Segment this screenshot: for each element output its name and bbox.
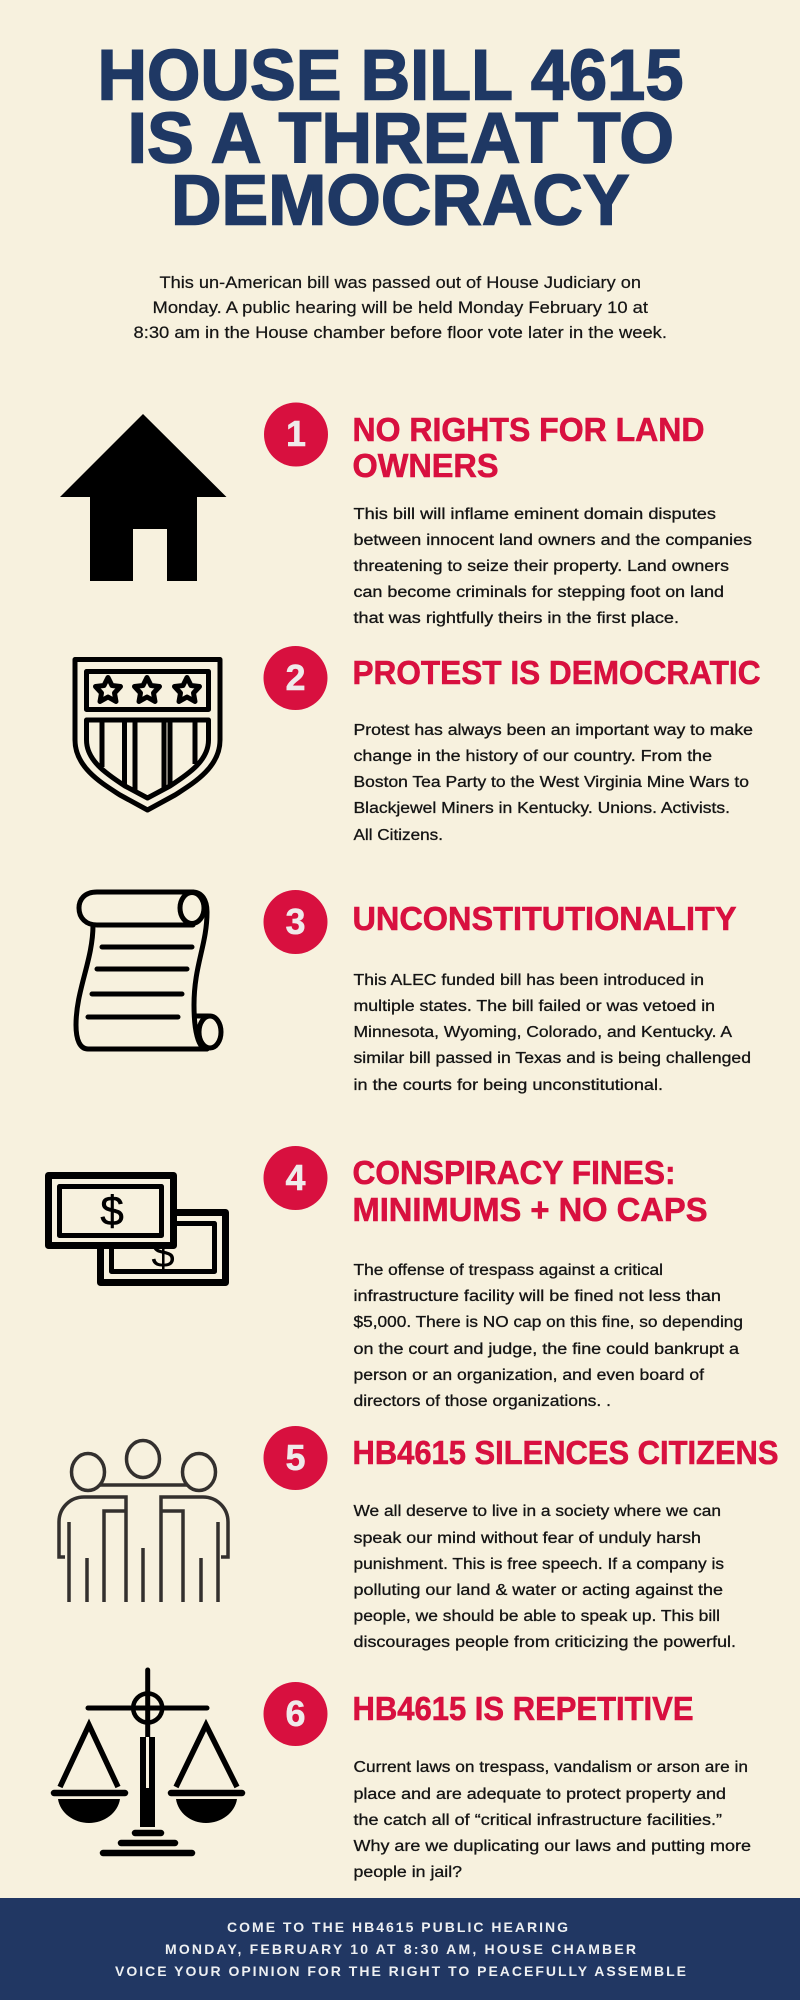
title: HOUSE BILL 4615	[98, 36, 684, 116]
icon: scales of justice	[54, 1670, 242, 1853]
number badge 6	[264, 1682, 328, 1746]
body text 6: place and are adequate to protect property and	[354, 1786, 726, 1803]
icon: money: $	[100, 1187, 124, 1234]
footer band	[0, 1898, 800, 2000]
number badge 5	[264, 1426, 328, 1490]
footer text	[115, 1919, 686, 1979]
body text 2: change in the history of our country. From the	[354, 748, 712, 765]
number badge 3	[264, 890, 328, 954]
panel: unconstitutionality	[76, 890, 751, 1094]
body text 2	[354, 722, 753, 844]
body text 4: $5,000. There is NO cap on this fine, so depending	[354, 1314, 743, 1331]
body text 6: the catch all of “critical infrastructure facilities.”	[354, 1812, 722, 1829]
intro text: This un-American bill was passed out of House Judiciary on	[160, 274, 641, 292]
body text 1: that was rightfully theirs in the first place.	[354, 610, 679, 627]
body text 2: All Citizens.	[354, 827, 443, 844]
body text 3	[354, 972, 751, 1094]
body text 2: Protest has always been an important way to make	[354, 722, 753, 739]
heading 4: CONSPIRACY FINES:	[352, 1154, 676, 1191]
body text 5: speak our mind without fear of unduly harsh	[354, 1530, 701, 1547]
intro text: 8:30 am in the House chamber before floor vote later in the week.	[134, 324, 667, 342]
body text 1	[354, 506, 752, 627]
body text 5: discourages people from criticizing the powerful.	[354, 1634, 736, 1651]
body text 1: can become criminals for stepping foot on land	[354, 584, 724, 601]
heading 5: HB4615 SILENCES CITIZENS	[352, 1434, 778, 1471]
number badge 1: 1	[286, 413, 306, 454]
panel: conspiracy fines	[48, 1146, 743, 1410]
body text 5: punishment. This is free speech. If a company is	[354, 1556, 724, 1573]
heading 3: UNCONSTITUTIONALITY	[352, 900, 736, 937]
body text 5: polluting our land & water or acting against the	[354, 1582, 723, 1599]
number badge 4	[264, 1146, 328, 1210]
heading 6: HB4615 IS REPETITIVE	[352, 1690, 694, 1727]
icon: money	[48, 1176, 226, 1282]
icon: shield	[75, 660, 220, 810]
icon: scroll	[76, 892, 221, 1049]
body text 3: multiple states. The bill failed or was vetoed in	[354, 998, 715, 1015]
body text 4: on the court and judge, the fine could bankrupt a	[354, 1341, 739, 1358]
body text 2: Blackjewel Miners in Kentucky. Unions. Activists.	[354, 800, 730, 817]
body text 1: threatening to seize their property. Land owners	[354, 558, 729, 575]
body text 4: infrastructure facility will be fined not less than	[354, 1288, 721, 1305]
number badge 6: 6	[285, 1693, 306, 1734]
number badge 3: 3	[285, 901, 306, 942]
panel: silences citizens	[59, 1426, 778, 1651]
title	[98, 36, 684, 240]
heading 4	[352, 1154, 708, 1228]
footer text: MONDAY, FEBRUARY 10 AT 8:30 AM, HOUSE CHAMBER	[165, 1941, 636, 1957]
number badge 2: 2	[285, 657, 306, 698]
panel: repetitive	[54, 1670, 751, 1881]
heading 2: PROTEST IS DEMOCRATIC	[352, 654, 760, 691]
body text 5: We all deserve to live in a society where we can	[354, 1503, 721, 1520]
body text 3: in the courts for being unconstitutional.	[354, 1077, 663, 1094]
icon: house	[60, 414, 226, 581]
number badge 2	[264, 646, 328, 710]
body text 5: people, we should be able to speak up. This bill	[354, 1608, 720, 1625]
body text 4: The offense of trespass against a critical	[354, 1262, 663, 1279]
footer text: COME TO THE HB4615 PUBLIC HEARING	[227, 1919, 568, 1935]
number badge 5: 5	[285, 1437, 306, 1478]
number badge 1	[264, 402, 328, 466]
body text 4: directors of those organizations. .	[354, 1393, 611, 1410]
heading 1: NO RIGHTS FOR LAND	[352, 411, 704, 448]
body text 5	[354, 1503, 736, 1651]
heading 1: OWNERS	[352, 447, 498, 484]
body text 4	[354, 1262, 743, 1410]
body text 6: Current laws on trespass, vandalism or arson are in	[354, 1759, 748, 1776]
panel: protest is democratic	[75, 646, 760, 844]
title: IS A THREAT TO	[128, 100, 674, 178]
body text 4: person or an organization, and even board of	[354, 1367, 705, 1384]
body text 6	[354, 1759, 751, 1881]
body text 3: similar bill passed in Texas and is being challenged	[354, 1050, 751, 1067]
body text 1: between innocent land owners and the companies	[354, 532, 752, 549]
heading 4: MINIMUMS + NO CAPS	[352, 1191, 708, 1228]
body text 3: This ALEC funded bill has been introduced in	[354, 972, 704, 989]
icon: people	[59, 1440, 228, 1602]
title: DEMOCRACY	[171, 162, 630, 240]
footer text: VOICE YOUR OPINION FOR THE RIGHT TO PEACEFULLY ASSEMBLE	[115, 1963, 686, 1979]
body text 1: This bill will inflame eminent domain disputes	[354, 506, 716, 523]
panel: no rights for land owners	[60, 402, 752, 627]
body text 6: Why are we duplicating our laws and putting more	[354, 1838, 751, 1855]
number badge 4: 4	[285, 1157, 306, 1198]
icon: money: $	[151, 1229, 175, 1276]
heading 1	[352, 411, 704, 484]
intro text: Monday. A public hearing will be held Monday February 10 at	[152, 299, 648, 317]
body text 6: people in jail?	[354, 1864, 462, 1881]
body text 3: Minnesota, Wyoming, Colorado, and Kentucky. A	[354, 1024, 733, 1041]
body text 2: Boston Tea Party to the West Virginia Mine Wars to	[354, 774, 749, 791]
intro text	[134, 274, 667, 342]
